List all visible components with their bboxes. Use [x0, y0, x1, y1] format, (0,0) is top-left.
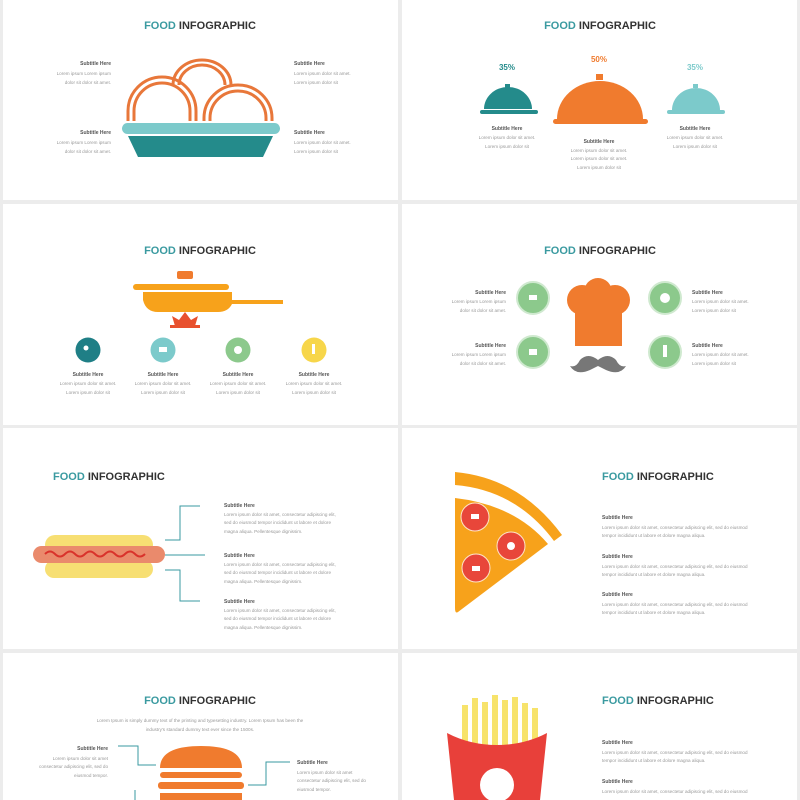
texts: Lorem ipsum dolor sit amet. [60, 381, 116, 386]
icons [517, 282, 681, 368]
texts: Lorem ipsum Lorem ipsum [452, 352, 506, 357]
texts: Subtitle Here [602, 515, 633, 521]
slide 7: burger: Lorem ipsum dolor sit amet [297, 770, 353, 775]
slide 5: hot dog: magna aliqua. Pellentesque dignissim. [224, 529, 302, 534]
cloche teal [484, 87, 532, 109]
cloche light teal [672, 88, 720, 110]
mustache [570, 356, 626, 372]
texts: Subtitle Here [224, 503, 255, 509]
slide 2: cloches [402, 0, 797, 200]
slide 5: hot dog: Lorem ipsum dolor sit amet, consectetur adipiscing elit, [224, 512, 336, 517]
texts: Lorem ipsum Lorem ipsum [57, 140, 111, 145]
texts: Subtitle Here [475, 343, 506, 349]
slide 1: spaghetti bowl: Lorem ipsum dolor sit amet. [294, 71, 351, 76]
texts: dolor sit dolor sit amet. [65, 80, 111, 85]
slide 5: hot dog: sed do eiusmod tempor incididunt ut labore et dolore [224, 616, 331, 621]
slide 6: pizza: tempor incididunt ut labore et dolore magna aliqua. [602, 533, 705, 538]
title: FOOD INFOGRAPHIC [53, 471, 165, 483]
slide 6: pizza: Subtitle Here [602, 592, 633, 598]
texts: Subtitle Here [223, 372, 254, 378]
slide 7: burger: industry's standard dummy text ever since the 1500s. [146, 727, 254, 732]
texts: eiusmod tempor. [74, 773, 108, 778]
slide 5: hot dog: sed do eiusmod tempor incididunt ut labore et dolore [224, 520, 331, 525]
texts: Lorem ipsum dolor sit amet. [210, 381, 266, 386]
slide 4: chef hat: Subtitle Here [692, 343, 723, 349]
slide 1: spaghetti bowl: Lorem ipsum dolor sit [294, 80, 339, 85]
texts: Subtitle Here [584, 139, 615, 145]
texts [57, 61, 111, 154]
fries [462, 695, 538, 750]
texts: Lorem ipsum dolor sit amet. [571, 148, 627, 153]
connectors [118, 746, 290, 800]
intro: Lorem Ipsum is simply dummy text of the printing and typesetting industry. Lorem Ipsum has been the [97, 718, 304, 723]
texts: Subtitle Here [680, 126, 711, 132]
slide 6: pizza: Lorem ipsum dolor sit amet, consectetur adipiscing elit, sed do eiusmod [602, 564, 748, 569]
texts: Lorem ipsum dolor sit [577, 165, 622, 170]
texts: Lorem ipsum dolor sit amet. [571, 156, 627, 161]
slide 1: spaghetti bowl: Subtitle Here [294, 130, 325, 136]
slide 5: hot dog: Subtitle Here [224, 553, 255, 559]
texts: Subtitle Here [299, 372, 330, 378]
slide 1: spaghetti bowl: Subtitle Here [294, 61, 325, 67]
texts: Subtitle Here [80, 130, 111, 136]
slide 4: chef hat [402, 204, 797, 425]
texts [452, 290, 506, 366]
texts: Subtitle Here [80, 61, 111, 67]
slide 4: chef hat: Lorem ipsum dolor sit amet. [692, 299, 749, 304]
texts: Subtitle Here [148, 372, 179, 378]
slide 8: fries: Lorem ipsum dolor sit amet, consectetur adipiscing elit, sed do eiusmod [602, 789, 748, 794]
texts [60, 372, 342, 395]
texts [479, 126, 723, 170]
texts: Lorem ipsum dolor sit amet. [135, 381, 191, 386]
slide 6: pizza [402, 428, 797, 649]
texts: Lorem ipsum dolor sit [66, 390, 111, 395]
slide 5: hot dog: magna aliqua. Pellentesque dignissim. [224, 625, 302, 630]
slide 1: spaghetti bowl: Lorem ipsum dolor sit [294, 149, 339, 154]
noodle rings [128, 60, 272, 121]
title: FOOD INFOGRAPHIC [544, 245, 656, 257]
slide 7: burger: Subtitle Here [297, 760, 328, 766]
slide 5: hot dog: Subtitle Here [224, 599, 255, 605]
title: FOOD INFOGRAPHIC [602, 695, 714, 707]
texts [39, 746, 109, 778]
title: FOOD INFOGRAPHIC [144, 20, 256, 32]
bowl [122, 123, 280, 134]
slide 4: chef hat: Lorem ipsum dolor sit [692, 361, 737, 366]
slide 6: pizza: Subtitle Here [602, 554, 633, 560]
slide 7: burger: consectetur adipiscing elit, sed do [297, 778, 366, 783]
slide 7: burger [3, 653, 398, 800]
texts: Subtitle Here [77, 746, 108, 752]
title: FOOD INFOGRAPHIC [144, 695, 256, 707]
box [447, 733, 547, 800]
slide 6: pizza: Lorem ipsum dolor sit amet, consectetur adipiscing elit, sed do eiusmod [602, 525, 748, 530]
hot dog [45, 535, 153, 555]
texts: Subtitle Here [475, 290, 506, 296]
slide 5: hot dog: magna aliqua. Pellentesque dignissim. [224, 579, 302, 584]
slide 2: cloches: 35% [687, 63, 703, 72]
pan [177, 271, 193, 279]
title: FOOD INFOGRAPHIC [602, 471, 714, 483]
slide 5: hot dog: Lorem ipsum dolor sit amet, consectetur adipiscing elit, [224, 562, 336, 567]
texts: Lorem ipsum dolor sit [141, 390, 186, 395]
slide 7: burger: eiusmod tempor. [297, 787, 331, 792]
texts: Lorem ipsum dolor sit [485, 144, 530, 149]
slide 4: chef hat: Lorem ipsum dolor sit [692, 308, 737, 313]
title: FOOD INFOGRAPHIC [144, 245, 256, 257]
texts: Lorem ipsum dolor sit [673, 144, 718, 149]
pizza slice [455, 472, 562, 541]
title: FOOD INFOGRAPHIC [544, 20, 656, 32]
slide 1: spaghetti bowl [3, 0, 398, 200]
slide 4: chef hat: Subtitle Here [692, 290, 723, 296]
texts: Lorem ipsum dolor sit amet. [286, 381, 342, 386]
slide 5: hot dog [3, 428, 398, 649]
texts: dolor sit dolor sit amet. [460, 361, 506, 366]
slide 6: pizza: tempor incididunt ut labore et dolore magna aliqua. [602, 610, 705, 615]
slide 8: fries: Lorem ipsum dolor sit amet, consectetur adipiscing elit, sed do eiusmod [602, 750, 748, 755]
percentages: 35% [499, 63, 515, 72]
texts: Lorem ipsum dolor sit amet. [667, 135, 723, 140]
slide 5: hot dog: Lorem ipsum dolor sit amet, consectetur adipiscing elit, [224, 608, 336, 613]
connectors [165, 506, 205, 601]
slide 3: pan [3, 204, 398, 425]
texts: Lorem ipsum dolor sit amet [53, 756, 109, 761]
texts: dolor sit dolor sit amet. [460, 308, 506, 313]
texts: Lorem ipsum Lorem ipsum [57, 71, 111, 76]
slide 8: fries: Subtitle Here [602, 779, 633, 785]
texts: Subtitle Here [492, 126, 523, 132]
chef hat [567, 278, 630, 346]
icons [76, 338, 100, 362]
texts: Subtitle Here [73, 372, 104, 378]
texts: Lorem ipsum dolor sit [216, 390, 261, 395]
slide 4: chef hat: Lorem ipsum dolor sit amet. [692, 352, 749, 357]
slide 5: hot dog: sed do eiusmod tempor incididunt ut labore et dolore [224, 570, 331, 575]
slide 6: pizza: tempor incididunt ut labore et dolore magna aliqua. [602, 572, 705, 577]
texts: Lorem ipsum dolor sit amet. [479, 135, 535, 140]
texts: Lorem ipsum Lorem ipsum [452, 299, 506, 304]
texts: dolor sit dolor sit amet. [65, 149, 111, 154]
burger [160, 746, 242, 768]
texts: consectetur adipiscing elit, sed do [39, 764, 108, 769]
slide 1: spaghetti bowl: Lorem ipsum dolor sit amet. [294, 140, 351, 145]
slide 6: pizza: Lorem ipsum dolor sit amet, consectetur adipiscing elit, sed do eiusmod [602, 602, 748, 607]
texts: Lorem ipsum dolor sit [292, 390, 337, 395]
slide 8: fries: tempor incididunt ut labore et dolore magna aliqua. [602, 758, 705, 763]
slide 8: fries [402, 653, 797, 800]
texts: Subtitle Here [602, 740, 633, 746]
slide 2: cloches: 50% [591, 55, 607, 64]
cloche orange [557, 81, 643, 119]
